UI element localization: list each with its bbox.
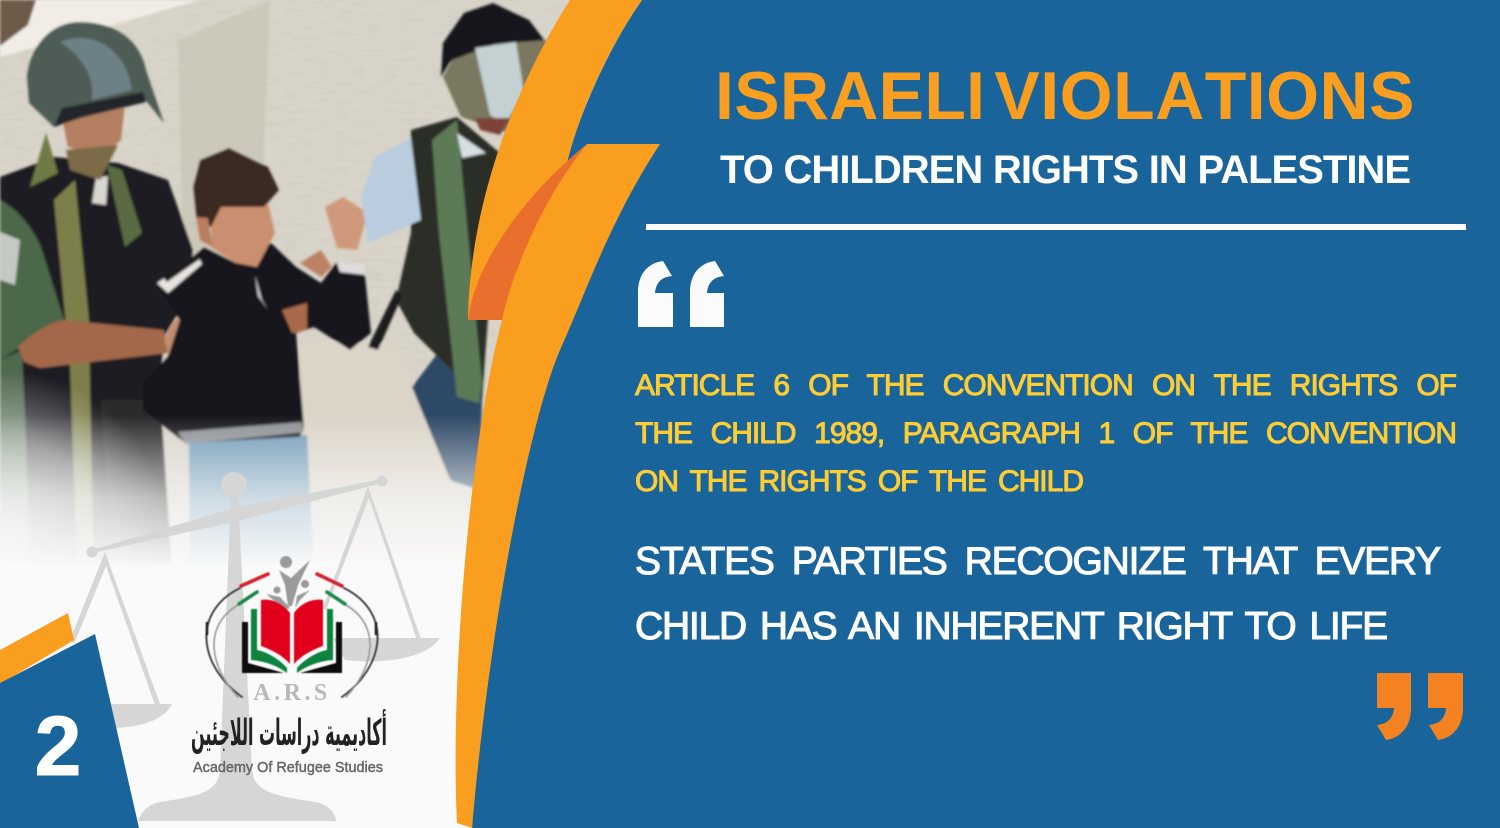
divider line (646, 224, 1466, 230)
title: ISRAELI VIOLATIONS (715, 58, 1415, 134)
boy in black jacket (143, 148, 371, 570)
logo Arabic name: أكاديمية دراسات اللاجئين (191, 709, 387, 754)
logo: Academy of Refugee Studies (191, 556, 387, 776)
logo graphic (206, 556, 378, 697)
left soldier (0, 22, 216, 570)
icon: opening quotation mark (638, 261, 724, 327)
orange swoosh upper (468, 0, 642, 320)
orange swoosh lower (456, 144, 660, 828)
quote line 1: STATES PARTIES RECOGNIZE THAT EVERY (635, 540, 1440, 583)
article citation line 2: THE CHILD 1989, PARAGRAPH 1 OF THE CONVENTION (635, 417, 1456, 450)
white fade over photo (0, 415, 600, 565)
number tab (0, 634, 139, 828)
article citation line 3: ON THE RIGHTS OF THE CHILD (635, 465, 1083, 498)
right soldier (361, 3, 548, 490)
icon: closing quotation mark (1377, 673, 1463, 740)
number tab accent (0, 613, 74, 684)
photo: soldiers detaining a crying boy (0, 0, 600, 620)
number 2: 2 (35, 699, 81, 793)
logo English name: Academy Of Refugee Studies (193, 760, 383, 776)
dark orange fold (468, 144, 587, 320)
logo initials: A.R.S (253, 680, 331, 706)
quote line 2: CHILD HAS AN INHERENT RIGHT TO LIFE (635, 605, 1387, 648)
scales of justice watermark (70, 472, 440, 821)
article citation line 1: ARTICLE 6 OF THE CONVENTION ON THE RIGHTS OF (635, 369, 1456, 402)
subtitle: TO CHILDREN RIGHTS IN PALESTINE (720, 148, 1410, 192)
blue main panel (472, 0, 1500, 828)
